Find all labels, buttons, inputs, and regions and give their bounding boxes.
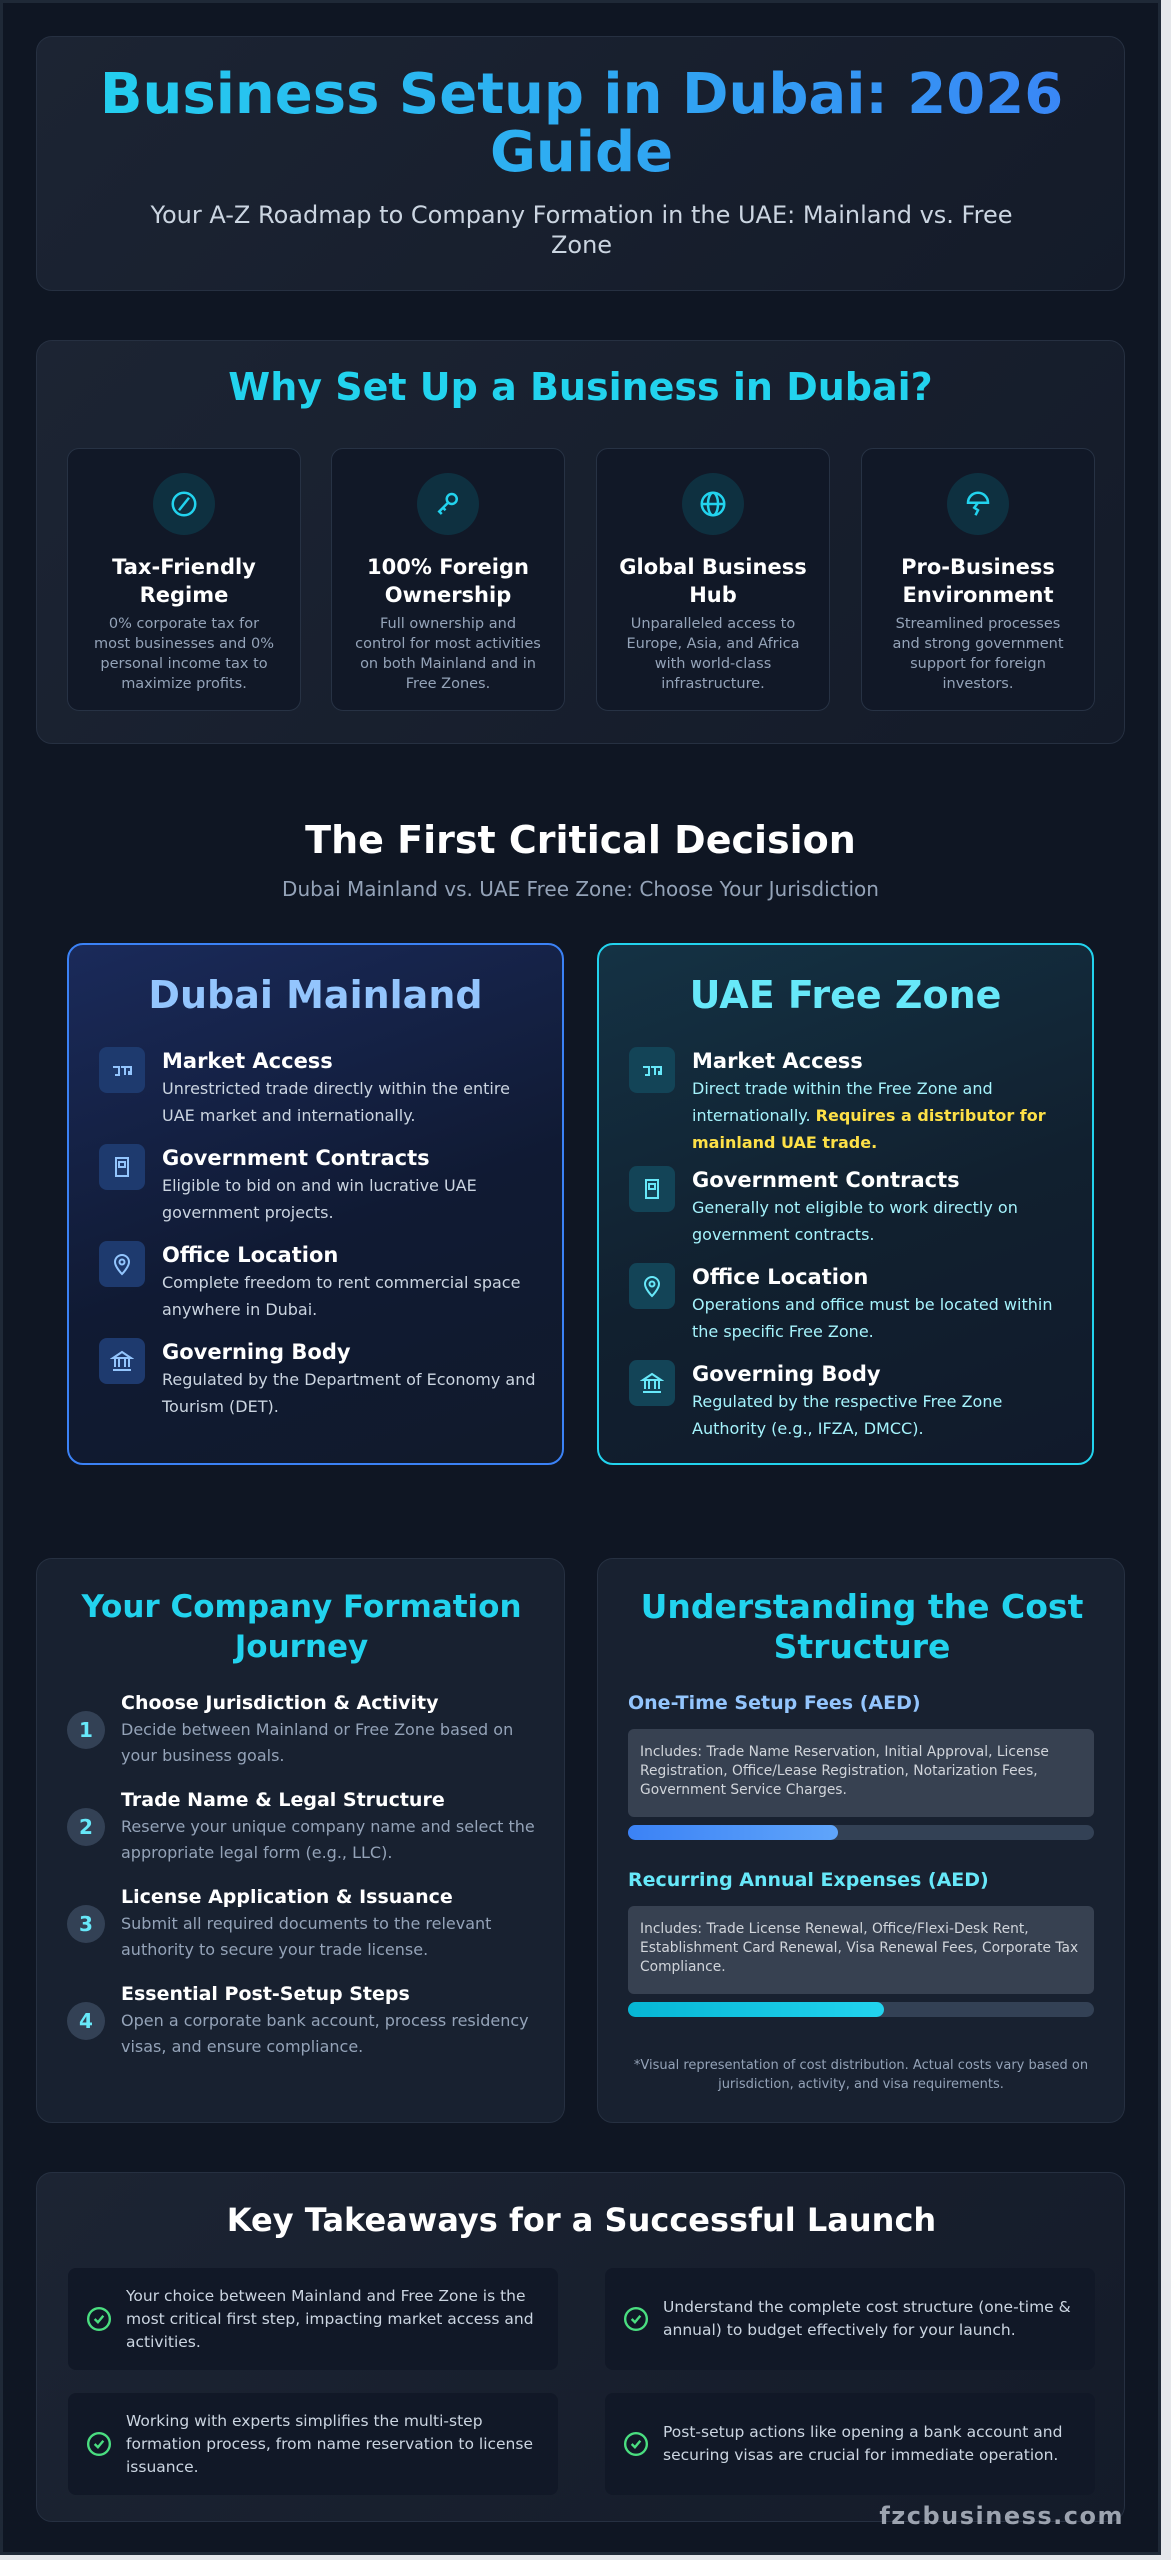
item: office location — [629, 1263, 1052, 1341]
step 3: 3 — [79, 1912, 93, 1936]
feature: pro-business: Pro-Business Environment — [901, 555, 1055, 607]
recurring expenses — [628, 1869, 1094, 2017]
why heading: Why Set Up a Business in Dubai? — [228, 365, 933, 409]
step 4: Essential Post-Setup Steps — [121, 1983, 410, 2005]
one-time fees: One-Time Setup Fees (AED) — [628, 1692, 921, 1714]
feature: ownership — [331, 448, 565, 711]
panel: cost structure — [597, 1558, 1125, 2123]
feature: ownership: 100% Foreign Ownership — [367, 555, 529, 607]
item: government contracts — [99, 1144, 477, 1222]
icon: handshake — [947, 473, 1009, 535]
panel: free zone — [597, 943, 1094, 1465]
item: governing body — [99, 1338, 535, 1416]
step 1: Choose Jurisdiction & Activity — [121, 1692, 438, 1714]
item: office location — [99, 1241, 520, 1319]
icon: tax — [153, 473, 215, 535]
step 3: Submit all required documents to the relevant authority to secure your trade license. — [121, 1914, 491, 1959]
feature: tax — [67, 448, 301, 711]
feature: tax: 0% corporate tax for most businesses and 0% personal income tax to maximize profits. — [94, 616, 274, 692]
footnote: *Visual representation of cost distribution. Actual costs vary based on jurisdiction, activity, and visa requirements. — [634, 2058, 1088, 2092]
item: office location: Office Location — [692, 1265, 868, 1289]
item: market access: Market Access — [162, 1049, 333, 1073]
step 4 — [67, 1983, 529, 2056]
item: government contracts — [629, 1166, 1018, 1244]
takeaway 2 — [605, 2268, 1095, 2370]
feature: tax: Tax-Friendly Regime — [112, 555, 256, 607]
step 1 — [67, 1692, 513, 1765]
one-time fees: Includes: Trade Name Reservation, Initial Approval, License Registration, Office/Lease Registration, Notarization Fees, Government Service Charges. — [640, 1744, 1049, 1798]
decision heading: The First Critical Decision — [305, 818, 856, 862]
step 1: 1 — [79, 1718, 93, 1742]
title: Business Setup in Dubai: 2026 Guide — [100, 62, 1063, 185]
item: market access: Unrestricted trade directly within the entire UAE market and internationally. — [162, 1079, 510, 1125]
item: market access: Market Access — [692, 1049, 863, 1073]
panel: free zone: UAE Free Zone — [690, 973, 1001, 1017]
item: market access: Direct trade within the Free Zone and internationally. Requires a distributor for mainland UAE trade. — [692, 1079, 1046, 1152]
item: government contracts: Eligible to bid on and win lucrative UAE government projects. — [162, 1176, 477, 1222]
step 4: Open a corporate bank account, process residency visas, and ensure compliance. — [121, 2011, 529, 2056]
cost heading: Understanding the Cost Structure — [641, 1587, 1083, 1666]
takeaway 1 — [68, 2268, 558, 2370]
subtitle: Your A-Z Roadmap to Company Formation in the UAE: Mainland vs. Free Zone — [150, 201, 1012, 259]
one-time fees — [628, 1692, 1094, 1840]
takeaway 2: Understand the complete cost structure (one-time & annual) to budget effectively for your launch. — [663, 2298, 1071, 2339]
recurring expenses: Includes: Trade License Renewal, Office/Flexi-Desk Rent, Establishment Card Renewal, Visa Renewal Fees, Corporate Tax Compliance. — [640, 1921, 1078, 1975]
step 4: 4 — [79, 2009, 93, 2033]
step 3: License Application & Issuance — [121, 1886, 453, 1908]
item: governing body — [629, 1360, 1002, 1438]
item: market access — [99, 1047, 510, 1125]
feature: hub: Global Business Hub — [619, 555, 807, 607]
journey heading: Your Company Formation Journey — [81, 1589, 522, 1665]
panel: journey — [36, 1558, 565, 2123]
feature: ownership: Full ownership and control for most activities on both Mainland and in Free Zones. — [355, 616, 541, 692]
item: governing body: Governing Body — [692, 1362, 881, 1386]
step 2 — [67, 1789, 535, 1862]
step 3 — [67, 1886, 491, 1959]
footer brand: fzcbusiness.com — [879, 2502, 1124, 2530]
icon: globe — [682, 473, 744, 535]
takeaway 3 — [68, 2393, 558, 2495]
takeaway 3: Working with experts simplifies the multi-step formation process, from name reservation to license issuance. — [126, 2412, 533, 2476]
recurring expenses: Recurring Annual Expenses (AED) — [628, 1869, 989, 1891]
panel: key takeaways — [36, 2172, 1125, 2522]
item: government contracts: Generally not eligible to work directly on government contracts. — [692, 1198, 1018, 1244]
feature: pro-business: Streamlined processes and strong government support for foreign investors. — [892, 616, 1064, 692]
panel: why dubai — [36, 340, 1125, 744]
step 1: Decide between Mainland or Free Zone based on your business goals. — [121, 1720, 513, 1765]
item: office location: Complete freedom to rent commercial space anywhere in Dubai. — [162, 1273, 520, 1319]
takeaways heading: Key Takeaways for a Successful Launch — [227, 2201, 936, 2239]
item: office location: Office Location — [162, 1243, 338, 1267]
item: governing body: Regulated by the Department of Economy and Tourism (DET). — [162, 1370, 535, 1416]
item: office location: Operations and office must be located within the specific Free Zone. — [692, 1295, 1052, 1341]
decision subtitle: Dubai Mainland vs. UAE Free Zone: Choose Your Jurisdiction — [282, 877, 879, 901]
bar: one-time — [628, 1825, 1094, 1840]
feature: hub — [596, 448, 830, 711]
panel: mainland: Dubai Mainland — [148, 973, 483, 1017]
takeaway 4 — [605, 2393, 1095, 2495]
bar: recurring — [628, 2002, 1094, 2017]
feature: pro-business — [861, 448, 1095, 711]
item: government contracts: Government Contracts — [692, 1168, 960, 1192]
step 2: Trade Name & Legal Structure — [121, 1789, 445, 1811]
takeaway 1: Your choice between Mainland and Free Zone is the most critical first step, impacting market access and activities. — [126, 2286, 534, 2350]
step 2: 2 — [79, 1815, 93, 1839]
takeaway 4: Post-setup actions like opening a bank account and securing visas are crucial for immediate operation. — [663, 2423, 1062, 2464]
panel: mainland — [67, 943, 564, 1465]
step 2: Reserve your unique company name and select the appropriate legal form (e.g., LLC). — [121, 1817, 535, 1862]
item: government contracts: Government Contracts — [162, 1146, 430, 1170]
item: governing body: Governing Body — [162, 1340, 351, 1364]
item: market access — [629, 1047, 1046, 1152]
header card — [36, 36, 1125, 291]
feature: hub: Unparalleled access to Europe, Asia, and Africa with world-class infrastructure. — [626, 616, 800, 692]
icon: key — [417, 473, 479, 535]
item: governing body: Regulated by the respective Free Zone Authority (e.g., IFZA, DMCC). — [692, 1392, 1002, 1438]
